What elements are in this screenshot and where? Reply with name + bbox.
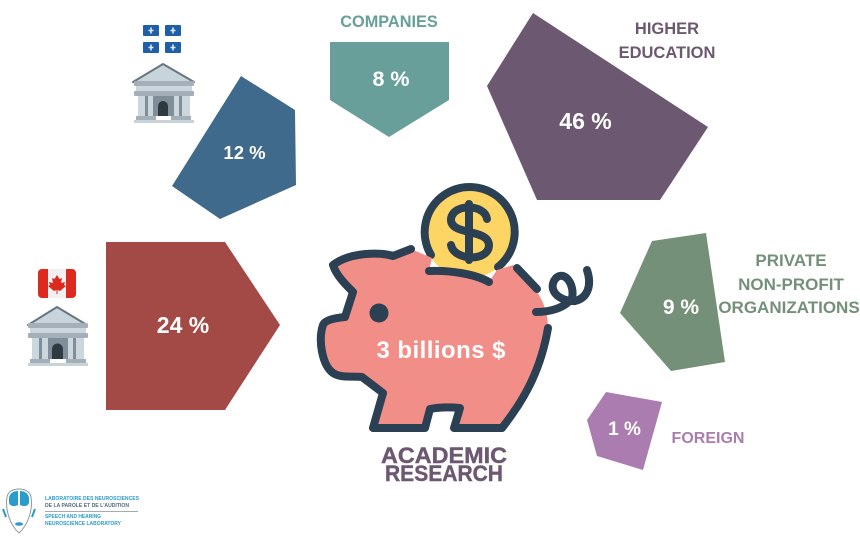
pig tail [536,270,589,312]
pig back stroke [517,268,537,289]
panel: higher education 46%: 46 % [559,108,612,134]
icon: provincial government building [133,64,194,123]
heading: private non-profit organizations: ORGANIZATIONS [718,298,860,317]
heading: academic research [381,443,507,486]
heading: higher education [619,20,715,62]
heading: academic research: RESEARCH [385,461,503,486]
logo: laboratory name: NEUROSCIENCE LABORATORY [45,521,122,527]
text: total amount: 3 billions $ [376,337,506,364]
heading: academic research: ACADEMIC [381,443,507,468]
panel: foreign 1% [587,392,662,470]
panel: provincial government 12% [172,76,296,219]
logo: laboratory name [45,496,140,527]
panel: foreign 1%: 1 % [608,419,641,440]
panel: companies 8%: 8 % [372,67,410,91]
heading: private non-profit organizations: PRIVATE [755,251,827,270]
icon: federal government building [28,307,88,366]
icon: Canadian flag [38,269,76,298]
logo: laboratory name: SPEECH AND HEARING [45,514,101,520]
heading: higher education: HIGHER [635,20,699,38]
panel: companies 8% [330,42,449,137]
pig body [321,249,548,428]
heading: private non-profit organizations [718,251,860,317]
logo: laboratory name: LABORATOIRE DES NEUROSCIENCES [45,496,140,502]
heading: higher education: EDUCATION [619,44,715,62]
panel: provincial government 12%: 12 % [223,142,266,163]
icon: coin [423,186,515,278]
pig eye [370,304,388,322]
panel: federal government 24%: 24 % [157,312,209,338]
panel: higher education 46% [487,13,708,200]
panel: federal government 24% [106,242,280,410]
logo: laboratory name: DE LA PAROLE ET DE L'AUDITION [45,503,129,509]
heading: foreign: FOREIGN [672,430,744,447]
coin slot [429,271,489,282]
icon: piggy bank with coin [321,186,589,428]
icon: Quebec flags [143,25,181,53]
panel: private non-profit 9% [620,233,725,371]
heading: private non-profit organizations: NON-PROFIT [738,275,844,294]
heading: companies: COMPANIES [340,13,438,31]
panel: private non-profit 9%: 9 % [663,296,699,319]
logo: laboratory head emblem [3,489,35,533]
pig outline [321,249,548,428]
